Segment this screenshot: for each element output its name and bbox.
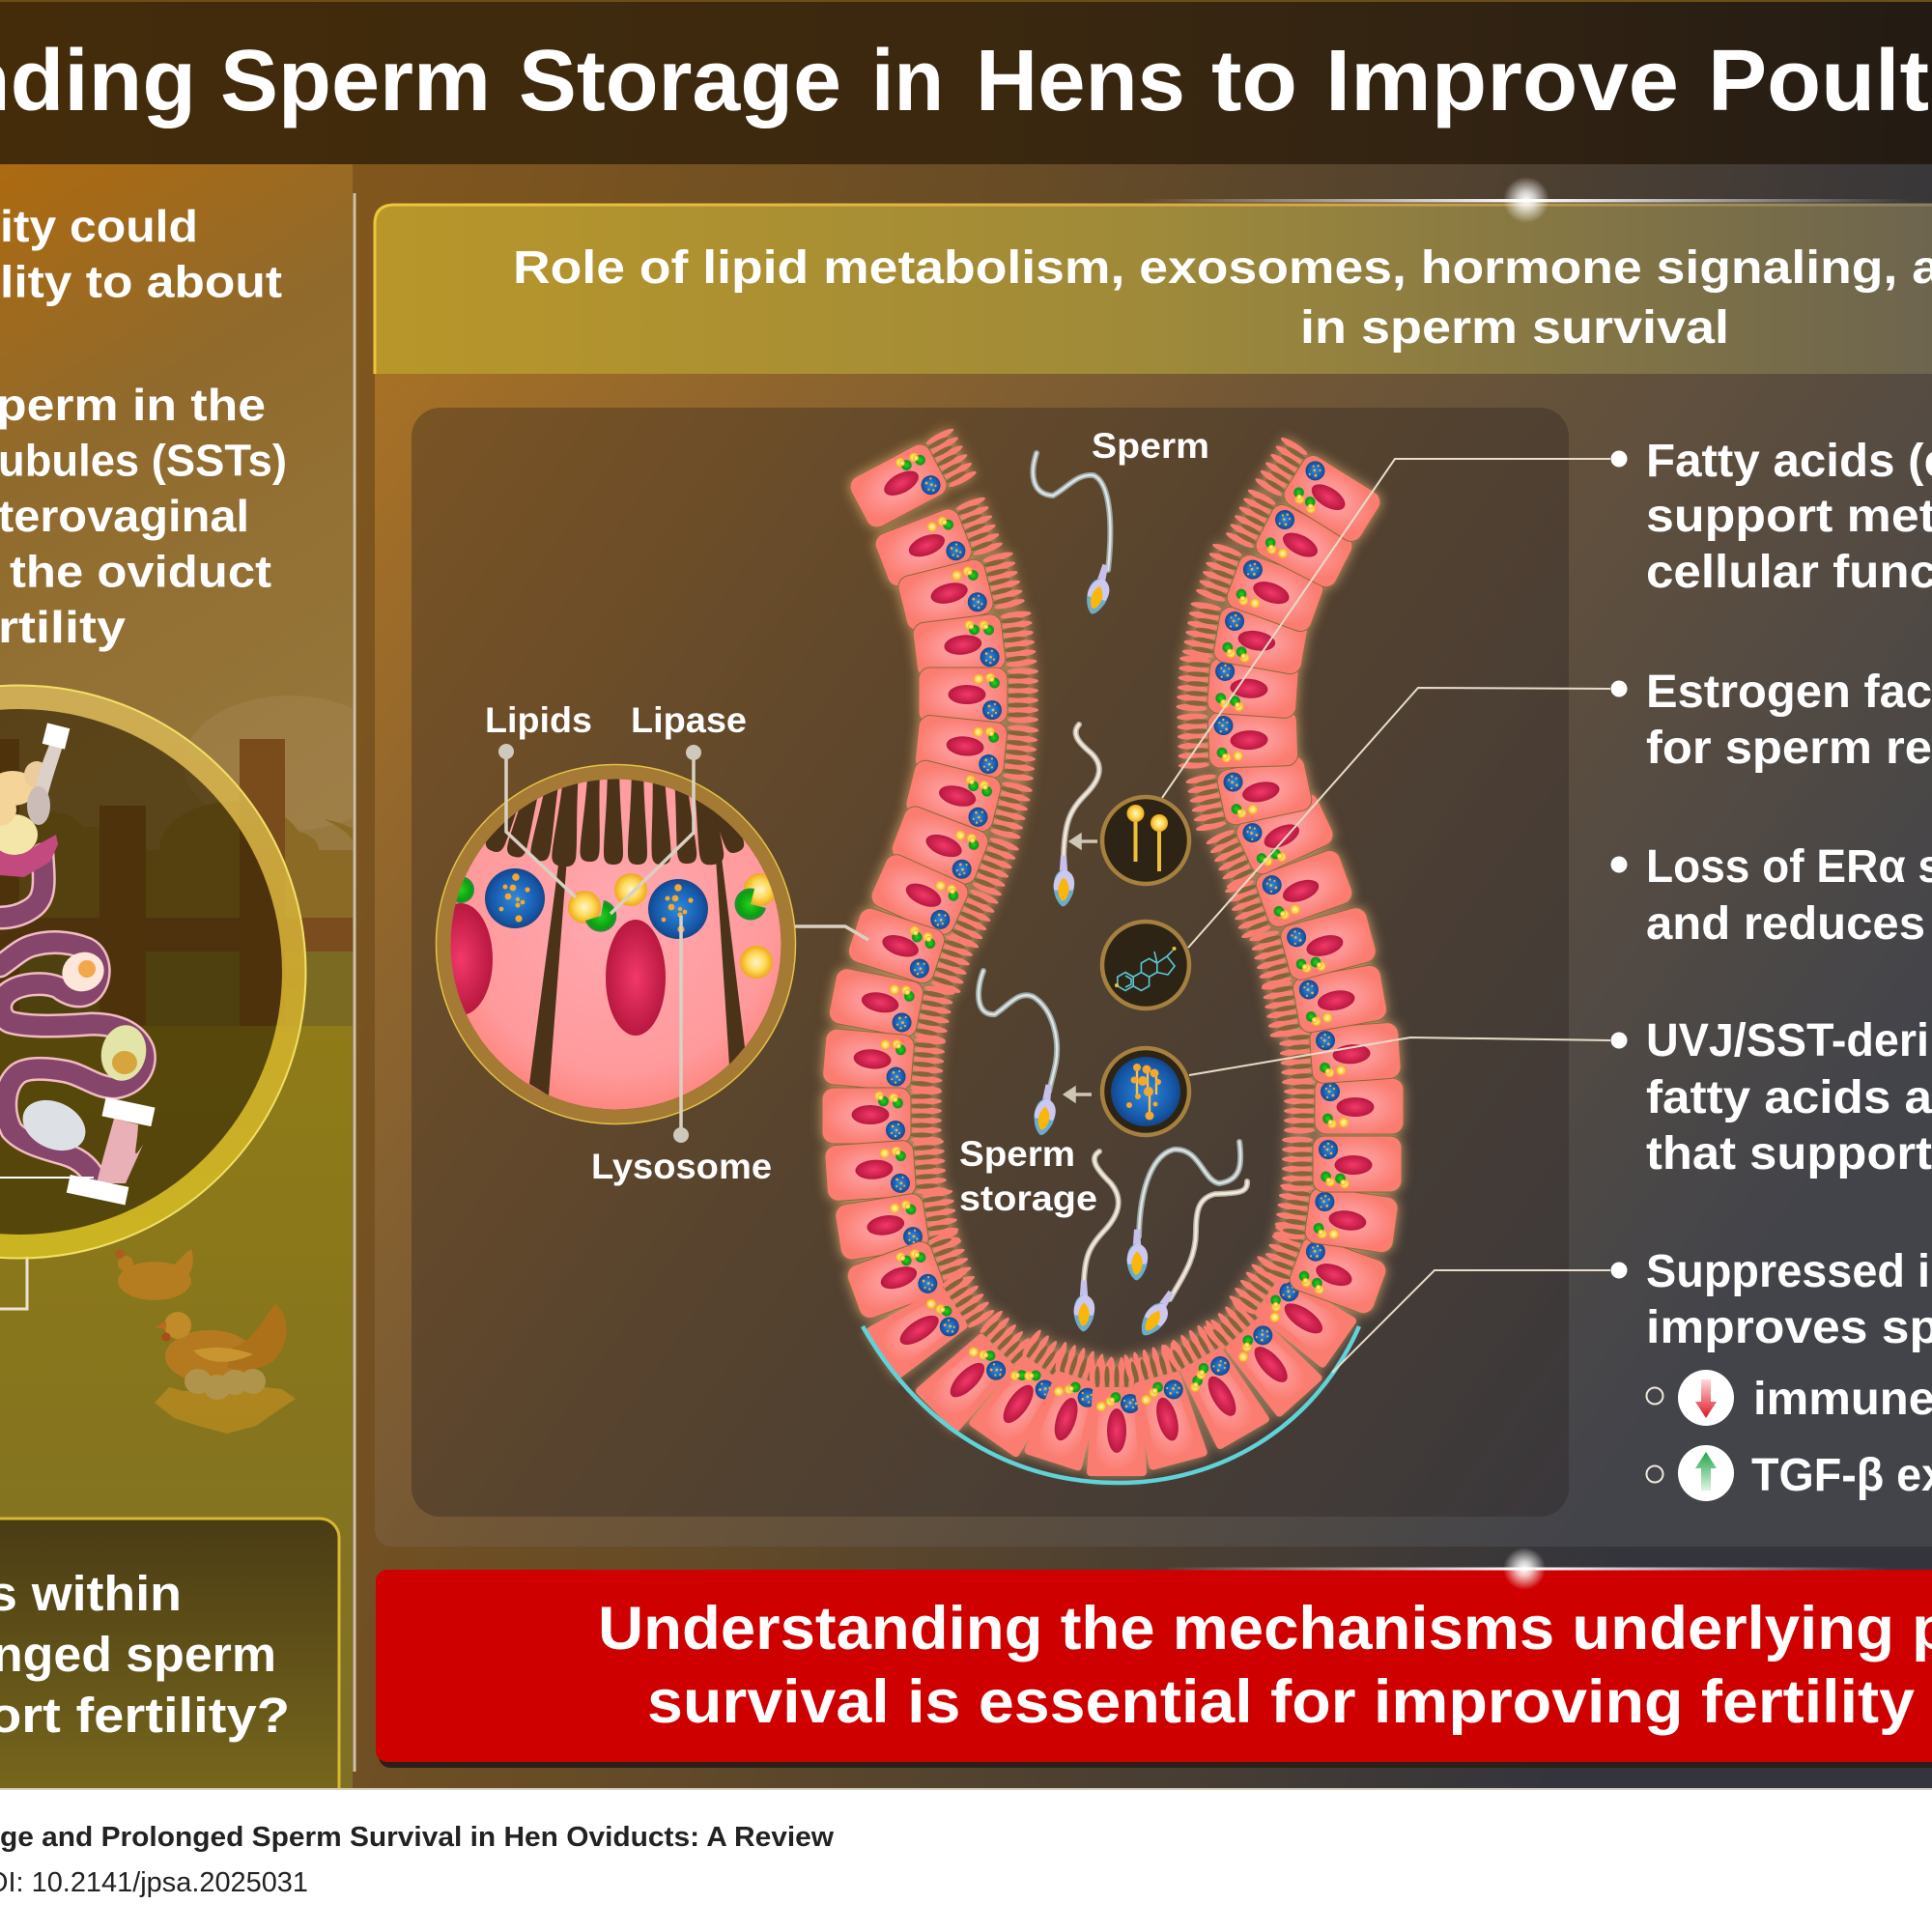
- label: Lysosome: Lysosome: [591, 1147, 772, 1186]
- left text block: sperm storage tubules: ubules (SSTs): [0, 435, 287, 485]
- vertical divider: [354, 193, 355, 1772]
- bullet: UVJ/SST exosomes: that support: [1646, 1128, 1932, 1179]
- bottom cells: [869, 1254, 1353, 1472]
- panel heading text: in sperm survival: [1300, 302, 1729, 354]
- sperm 6: [1135, 1181, 1247, 1341]
- conclusion text: survival is essential for improving fertility: [647, 1668, 1915, 1736]
- bullet: fatty acids: [1611, 436, 1932, 598]
- sperm 1: [1033, 453, 1116, 617]
- bullet: estrogen: Estrogen fac: [1646, 667, 1932, 718]
- left text block: sperm storage tubules: the oviduct: [10, 547, 271, 597]
- left text block: sperm storage tubules: rtility: [0, 602, 126, 652]
- callout lines: [1162, 459, 1610, 1373]
- cell junctions: [529, 858, 567, 1095]
- bullet: ER alpha: [1611, 841, 1932, 950]
- label: Lipase: Lipase: [631, 700, 747, 740]
- panel heading text: [513, 242, 1932, 354]
- sub-bullet: immune decrease: immune: [1753, 1374, 1932, 1425]
- label: Sperm storage: storage: [959, 1179, 1097, 1218]
- left text block: sperm storage tubules: terovaginal: [0, 491, 249, 541]
- title: Improve: [1325, 33, 1679, 129]
- title: Poult: [1708, 33, 1929, 129]
- conclusion text: [598, 1595, 1932, 1736]
- title: Hens: [976, 33, 1185, 129]
- icon: nesting hen: [155, 1304, 296, 1434]
- icon: estrogen molecule circle: [1102, 922, 1189, 1009]
- left text block: sperm storage tubules: [0, 380, 287, 652]
- label: Lipids: Lipids: [485, 700, 592, 740]
- citation: [0, 1822, 834, 1898]
- bullet: suppressed immunity: [1611, 1246, 1932, 1501]
- lysosomes: [485, 868, 708, 939]
- bullet: fatty acids: cellular func: [1646, 547, 1932, 598]
- bullet: UVJ/SST exosomes: fatty acids a: [1646, 1072, 1932, 1123]
- left wall cells: [822, 426, 1039, 1321]
- sub-bullet: TGF-beta increase: [1646, 1445, 1932, 1501]
- circle: oviduct inset: [0, 686, 305, 1258]
- label: Sperm: Sperm: [1092, 426, 1209, 466]
- right wall cells: [1176, 435, 1404, 1317]
- arrow: exosome to sperm: [1065, 1089, 1092, 1100]
- panel: oviduct diagram background: [412, 408, 1569, 1517]
- panel: question box: [0, 1517, 340, 1788]
- sub-bullet: immune decrease: [1646, 1370, 1932, 1426]
- panel: mechanisms: [375, 177, 1932, 1547]
- conclusion banner: [376, 1548, 1932, 1768]
- bullet: ER alpha: and reduces: [1646, 898, 1925, 950]
- bullet: suppressed immunity: Suppressed i: [1646, 1246, 1930, 1297]
- cyan basement membrane arc: [863, 1326, 1359, 1483]
- illustration: hen oviduct: [0, 723, 156, 1205]
- bullet: fatty acids: support met: [1646, 491, 1932, 542]
- label leader lines: [506, 752, 868, 1135]
- left text block: sperm storage tubules: perm in the: [0, 380, 266, 430]
- label: Sperm storage: [959, 1134, 1097, 1218]
- arrow: lipids to sperm: [1071, 836, 1097, 847]
- icon: exosome circle: [1102, 1048, 1189, 1135]
- white label tabs: [43, 723, 70, 750]
- panel heading text: Role of lipid metabolism, exosomes, hormone signaling, a: [513, 242, 1932, 294]
- title: [0, 33, 1929, 129]
- dark microvilli: [483, 747, 747, 867]
- sperm 2: [1054, 724, 1099, 906]
- magnified cell inset: [429, 744, 868, 1143]
- farm ground: [0, 1026, 353, 1789]
- left text block: fertility intro: lity to about: [0, 257, 282, 307]
- header bar: [0, 0, 1932, 164]
- farm grass band: [0, 952, 353, 1026]
- bullet: UVJ/SST exosomes: UVJ/SST-deri: [1646, 1015, 1929, 1066]
- citation: ge and Prolonged Sperm Survival in Hen Oviducts: A Review: [0, 1822, 834, 1853]
- label: Sperm storage: Sperm: [959, 1134, 1075, 1174]
- title: in: [871, 33, 944, 129]
- conclusion text: Understanding the mechanisms underlying p: [598, 1595, 1932, 1662]
- panel: left farm scene column: [0, 164, 353, 1788]
- fence: [0, 739, 353, 1026]
- sperm 4: [1074, 1151, 1119, 1331]
- bullet: estrogen: [1611, 667, 1932, 774]
- bottom white footer edge: [0, 1788, 1932, 1790]
- bullet: UVJ/SST exosomes: [1611, 1015, 1932, 1179]
- lipid droplets and lipases: [447, 873, 777, 979]
- farm bushes: [0, 802, 367, 918]
- sperm 5: [1127, 1142, 1240, 1280]
- eggs: [62, 952, 104, 991]
- title: Sperm: [220, 33, 491, 129]
- bullet: suppressed immunity: improves sp: [1646, 1302, 1932, 1353]
- icon: lipids circle: [1102, 797, 1189, 884]
- left text block: fertility intro: ity could: [0, 201, 198, 251]
- question text: [0, 1566, 290, 1743]
- nuclei: [606, 920, 666, 1036]
- bullet: estrogen: for sperm re: [1646, 723, 1932, 774]
- panel heading band: [375, 205, 1932, 374]
- oviduct epithelium (U-shaped cell wall): [822, 426, 1404, 1472]
- callout bracket below circle: [0, 1256, 27, 1309]
- sperm 3: [979, 971, 1060, 1137]
- question text: nged sperm: [0, 1627, 276, 1682]
- title: Storage: [519, 33, 841, 129]
- icon: hen top: [115, 1249, 193, 1300]
- left text block: fertility intro: [0, 201, 282, 307]
- title: to: [1211, 33, 1297, 129]
